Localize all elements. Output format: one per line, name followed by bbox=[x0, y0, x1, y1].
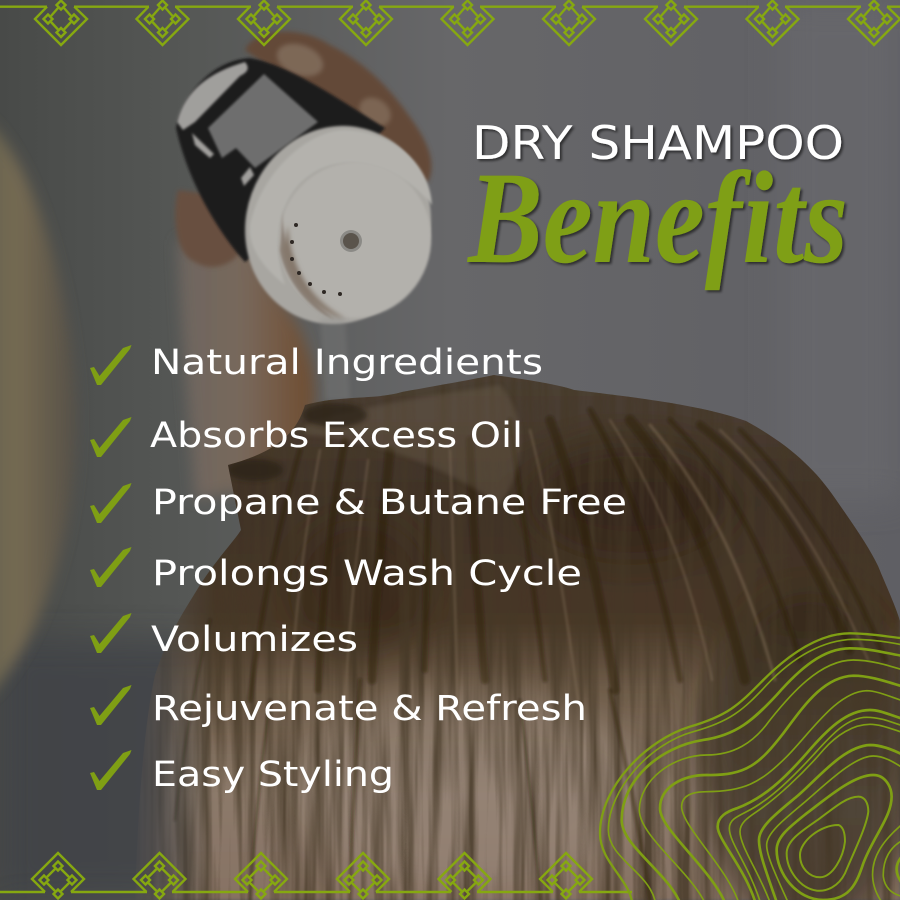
can: inner disc bbox=[257, 141, 453, 339]
item: Easy Styling bbox=[90, 750, 394, 795]
can: dark body bbox=[176, 58, 385, 262]
benefits list bbox=[90, 343, 627, 795]
hand: fingers behind can bbox=[245, 32, 431, 182]
blonde lengths bbox=[300, 690, 640, 890]
item: Easy Styling: Easy Styling bbox=[152, 755, 394, 795]
can: white cap bbox=[217, 100, 459, 350]
item: Propane & Butane Free: Propane & Butane Free bbox=[152, 483, 627, 523]
hair bbox=[100, 360, 900, 900]
can: centre hole bbox=[340, 230, 362, 252]
powder-dusted parting bbox=[305, 385, 521, 505]
raised arm bbox=[178, 240, 314, 500]
dark right side under contours bbox=[700, 590, 900, 900]
item: Rejuvenate & Refresh: Rejuvenate & Refresh bbox=[152, 689, 587, 729]
title line: Dry Shampoo: DRY SHAMPOO bbox=[472, 116, 844, 170]
light curved strands bbox=[290, 420, 868, 700]
blurred blonde hair at left bbox=[0, 110, 76, 695]
dark curved strands bbox=[175, 410, 885, 900]
item: Natural Ingredients: Natural Ingredients bbox=[151, 343, 543, 383]
dark patches at parting bbox=[303, 403, 367, 427]
contour lines decoration bbox=[600, 633, 900, 900]
bottom border bbox=[0, 853, 632, 898]
title bbox=[466, 116, 848, 291]
item: Prolongs Wash Cycle: Prolongs Wash Cycle bbox=[152, 554, 582, 594]
can: label text block bbox=[208, 74, 318, 168]
item: Volumizes: Volumizes bbox=[151, 620, 358, 660]
top border bbox=[0, 0, 900, 45]
noise strand texture bbox=[100, 360, 900, 900]
item: Prolongs Wash Cycle bbox=[90, 547, 582, 594]
item: Volumizes bbox=[90, 613, 358, 660]
item: Rejuvenate & Refresh bbox=[90, 685, 587, 729]
dark root shading bbox=[530, 440, 730, 560]
falling powder bbox=[320, 318, 350, 400]
item: Absorbs Excess Oil: Absorbs Excess Oil bbox=[150, 416, 523, 456]
can: shaker holes bbox=[290, 223, 342, 296]
